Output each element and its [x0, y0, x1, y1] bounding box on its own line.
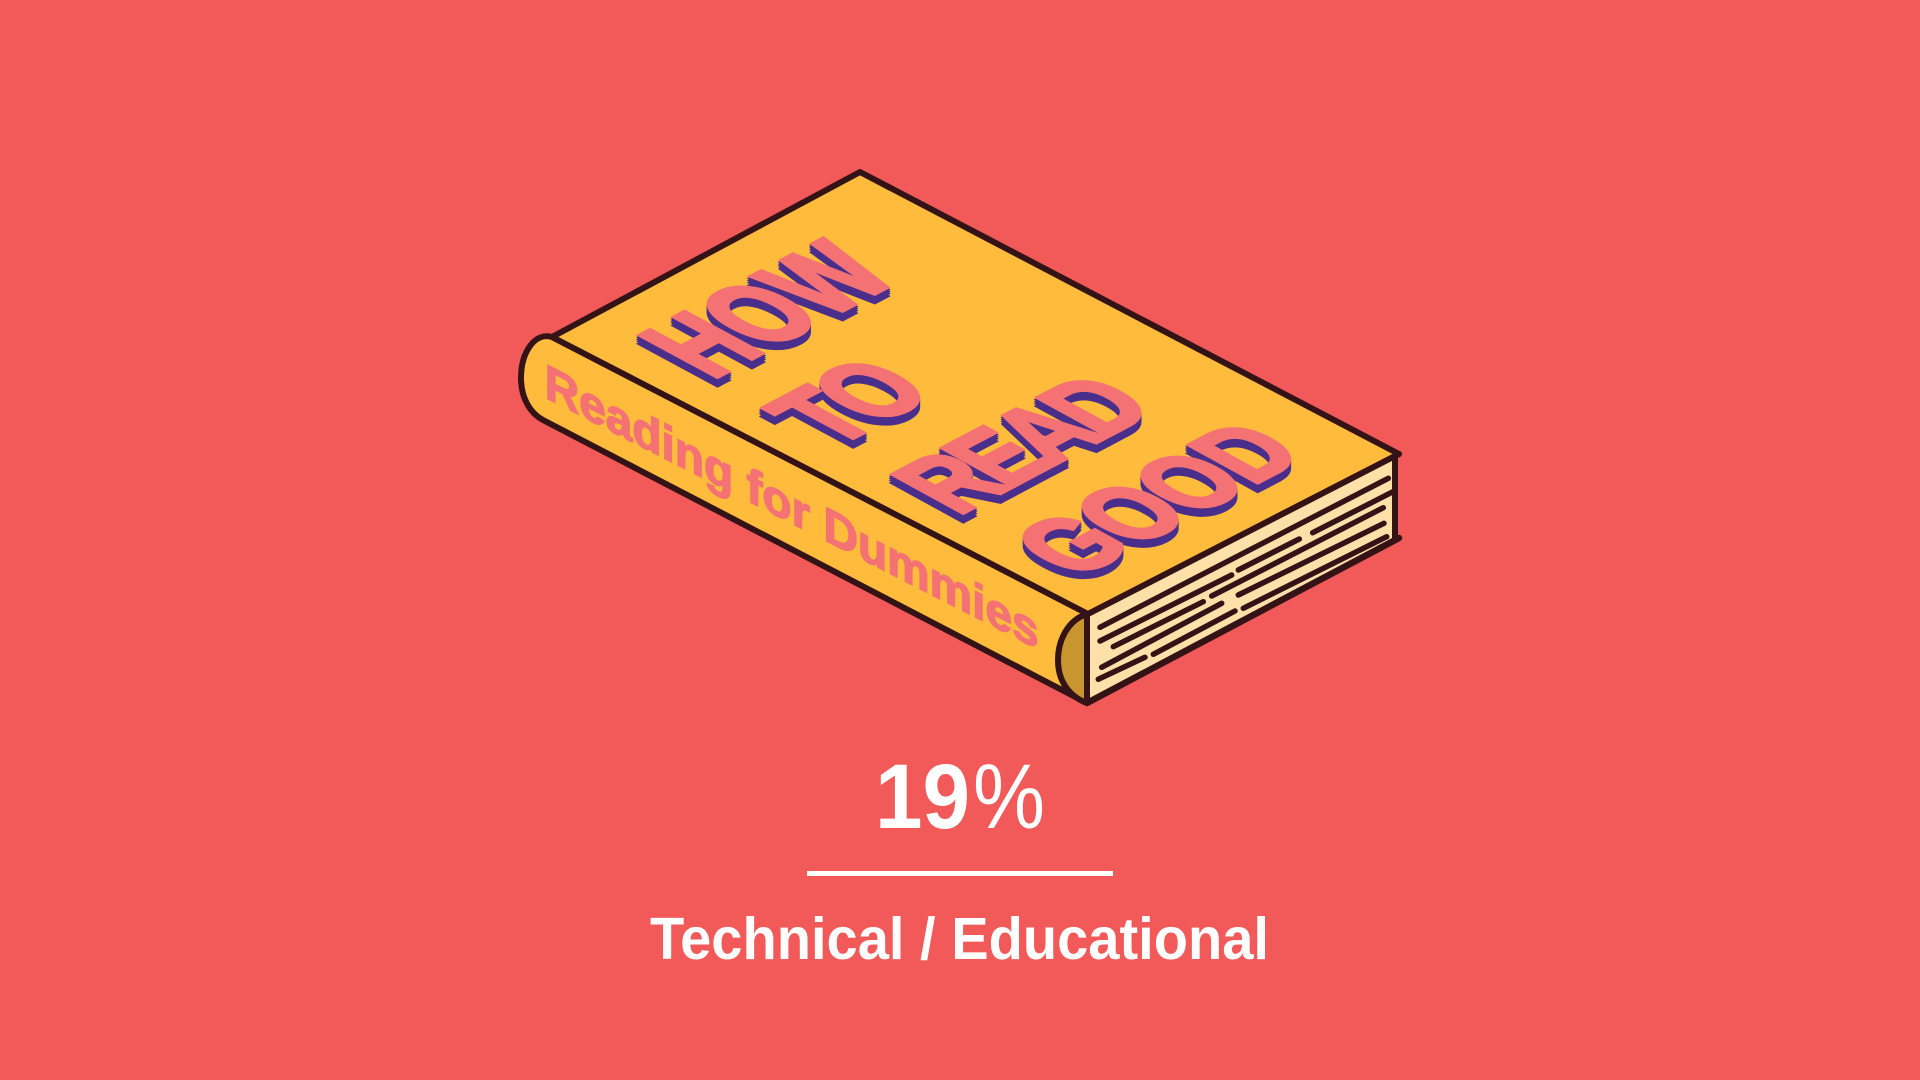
spine end cap: [1058, 614, 1087, 703]
cover title: How to read good: [611, 225, 1328, 591]
spine title: Reading for Dummies: [545, 352, 1039, 660]
illustration: isometric book: [521, 172, 1399, 703]
category label: Technical / Educational: [650, 906, 1269, 972]
divider: [807, 871, 1113, 876]
statistic: 19%: [875, 746, 1045, 848]
word: GOOD: GOOD: [986, 407, 1328, 591]
statistic: 19%: 19: [875, 746, 970, 848]
word: READ: READ: [865, 361, 1178, 528]
book front cover: [552, 172, 1399, 614]
page text lines: [1098, 478, 1393, 679]
statistic: 19%: %: [973, 746, 1045, 848]
book spine: [521, 336, 1088, 703]
book pages block: [1087, 454, 1399, 703]
word: HOW: HOW: [611, 225, 926, 393]
word: TO: TO: [740, 344, 957, 460]
